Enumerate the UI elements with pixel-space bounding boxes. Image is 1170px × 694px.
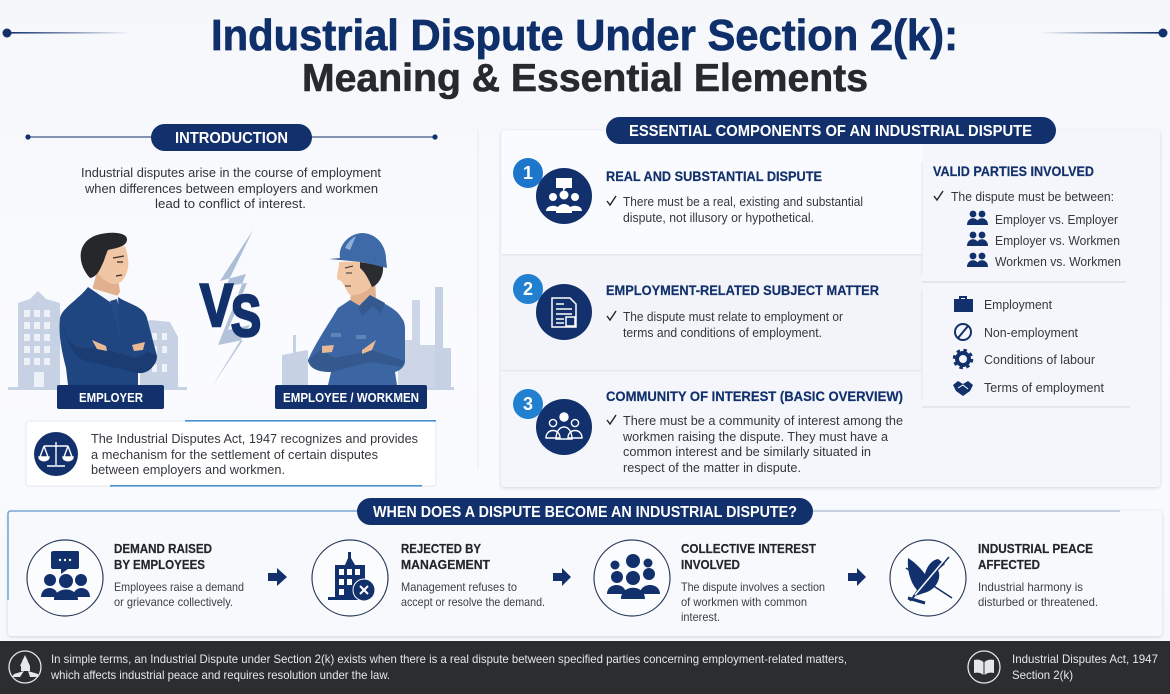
component 2: employment-related subject matter: terms and conditions of employment. bbox=[623, 326, 822, 340]
step 4: industrial peace affected: disturbed or threatened. bbox=[978, 595, 1098, 609]
step 2: rejected by management: accept or resolve the demand. bbox=[401, 595, 545, 609]
callout: Industrial Disputes Act: a mechanism for the settlement of certain disputes bbox=[91, 447, 378, 462]
step 3: collective interest: INVOLVED bbox=[681, 557, 740, 572]
arrow 2 bbox=[553, 568, 571, 586]
arrow 3 bbox=[848, 568, 866, 586]
illustration: lightning bolt bbox=[211, 230, 253, 388]
introduction text: Industrial disputes arise in the course of employment bbox=[81, 165, 381, 180]
callout: Industrial Disputes Act: between employers and workmen. bbox=[91, 462, 285, 477]
illustration: factory skyline behind worker bbox=[282, 287, 454, 390]
step 1: demand raised: BY EMPLOYEES bbox=[114, 557, 205, 572]
item: employment bbox=[954, 296, 1053, 312]
component 1: real and substantial dispute: 1 bbox=[523, 163, 533, 183]
item: conditions of labour bbox=[954, 350, 1095, 368]
illustration: VS: V bbox=[200, 272, 233, 339]
callout: Industrial Disputes Act bbox=[26, 420, 436, 487]
title: Meaning & Essential Elements bbox=[302, 57, 868, 100]
illustration: city buildings behind employer bbox=[8, 291, 187, 390]
component 1: real and substantial dispute bbox=[513, 158, 863, 225]
illustration: VS: S bbox=[231, 284, 261, 349]
step 2: rejected by management: Management refuses to bbox=[401, 580, 517, 594]
step 3: collective interest: The dispute involves a section bbox=[681, 580, 825, 594]
party: employer vs workmen: Employer vs. Workmen bbox=[995, 234, 1120, 248]
introduction heading: INTRODUCTION bbox=[175, 130, 288, 147]
step 4: industrial peace affected: Industrial harmony is bbox=[978, 580, 1083, 594]
step 3: collective interest: of workmen with common bbox=[681, 595, 807, 609]
arrow 1 bbox=[268, 568, 287, 586]
party: workmen vs workmen bbox=[967, 253, 1121, 269]
title bbox=[211, 11, 958, 100]
callout: Industrial Disputes Act: The Industrial Disputes Act, 1947 recognizes and provides bbox=[91, 431, 418, 446]
component 1: real and substantial dispute: dispute, not illusory or hypothetical. bbox=[623, 211, 814, 225]
illustration: VS bbox=[200, 272, 261, 349]
item: terms of employment: Terms of employment bbox=[984, 381, 1105, 395]
item: employment: Employment bbox=[984, 298, 1053, 312]
party: employer vs employer bbox=[967, 211, 1118, 227]
step 1: demand raised bbox=[27, 540, 244, 616]
step 3: collective interest bbox=[594, 540, 825, 624]
step 3: collective interest: interest. bbox=[681, 610, 720, 624]
icon: open book bbox=[968, 651, 1000, 683]
heading: when does a dispute become: WHEN DOES A DISPUTE BECOME AN INDUSTRIAL DISPUTE? bbox=[373, 504, 797, 521]
component 2: employment-related subject matter: 2 bbox=[523, 279, 533, 299]
introduction heading bbox=[25, 124, 438, 151]
valid parties involved: VALID PARTIES INVOLVED bbox=[933, 164, 1094, 179]
step 1: demand raised: DEMAND RAISED bbox=[114, 541, 212, 556]
panel: when does a dispute become an industrial dispute bbox=[8, 498, 1162, 636]
step 4: industrial peace affected: AFFECTED bbox=[978, 557, 1040, 572]
icon: scales of justice bbox=[34, 432, 78, 476]
step 3: collective interest: COLLECTIVE INTEREST bbox=[681, 541, 816, 556]
step 2: rejected by management bbox=[312, 540, 545, 616]
illustration: employer bbox=[59, 233, 157, 385]
item: non-employment bbox=[955, 324, 1079, 340]
subject matter list bbox=[922, 290, 1130, 408]
component 1: real and substantial dispute: REAL AND SUBSTANTIAL DISPUTE bbox=[606, 169, 822, 184]
component 3: community of interest: respect of the matter in dispute. bbox=[623, 461, 801, 475]
component 3: community of interest: There must be a community of interest among the bbox=[623, 414, 903, 428]
footer summary text: In simple terms, an Industrial Dispute under Section 2(k) exists when there is a real dispute between specified parties concerning employment-related matters, bbox=[51, 652, 847, 666]
panel: essential components bbox=[501, 117, 1160, 487]
footer citation: Section 2(k) bbox=[1012, 668, 1073, 682]
component 3: community of interest: 3 bbox=[523, 394, 533, 414]
introduction text: lead to conflict of interest. bbox=[155, 196, 306, 211]
valid parties involved bbox=[922, 162, 1126, 283]
heading: when does a dispute become bbox=[357, 498, 813, 525]
component 3: community of interest: common interest and be similarly situated in bbox=[623, 445, 871, 459]
step 2: rejected by management: MANAGEMENT bbox=[401, 557, 490, 572]
footer summary text bbox=[50, 652, 847, 682]
component 1: real and substantial dispute: There must be a real, existing and substantial bbox=[623, 195, 863, 209]
component 2: employment-related subject matter: EMPLOYMENT-RELATED SUBJECT MATTER bbox=[606, 283, 879, 298]
step 1: demand raised: or grievance collectively. bbox=[114, 595, 233, 609]
step 4: industrial peace affected bbox=[890, 540, 1098, 616]
introduction text bbox=[81, 165, 381, 211]
component 2: employment-related subject matter bbox=[513, 274, 879, 340]
item: conditions of labour: Conditions of labour bbox=[984, 353, 1095, 367]
label: employer: EMPLOYER bbox=[79, 390, 144, 405]
heading: essential components: ESSENTIAL COMPONENTS OF AN INDUSTRIAL DISPUTE bbox=[629, 123, 1032, 140]
footer citation: Industrial Disputes Act, 1947 bbox=[1012, 652, 1158, 666]
footer summary text: which affects industrial peace and requires resolution under the law. bbox=[50, 668, 390, 682]
label: employee / workmen: EMPLOYEE / WORKMEN bbox=[283, 390, 419, 405]
footer citation bbox=[1012, 652, 1158, 682]
component 2: employment-related subject matter: The dispute must relate to employment or bbox=[623, 310, 843, 324]
component 3: community of interest: workmen raising the dispute. They must have a bbox=[622, 430, 888, 444]
party: employer vs workmen bbox=[967, 232, 1120, 248]
step 1: demand raised: Employees raise a demand bbox=[114, 580, 244, 594]
icon: law figure bbox=[9, 651, 41, 683]
step 2: rejected by management: REJECTED BY bbox=[401, 541, 481, 556]
party: employer vs employer: Employer vs. Employer bbox=[995, 213, 1118, 227]
item: non-employment: Non-employment bbox=[984, 326, 1079, 340]
illustration: worker bbox=[308, 233, 405, 385]
label: employee / workmen bbox=[275, 385, 427, 409]
label: employer bbox=[57, 385, 164, 409]
heading: essential components bbox=[606, 117, 1056, 144]
footer bar bbox=[0, 641, 1170, 694]
title: Industrial Dispute Under Section 2(k): bbox=[211, 11, 958, 60]
introduction text: when differences between employers and workmen bbox=[84, 181, 378, 196]
step 4: industrial peace affected: INDUSTRIAL PEACE bbox=[978, 541, 1093, 556]
component 3: community of interest bbox=[513, 389, 903, 475]
party: workmen vs workmen: Workmen vs. Workmen bbox=[995, 255, 1121, 269]
valid parties involved: The dispute must be between: bbox=[951, 190, 1114, 204]
component 3: community of interest: COMMUNITY OF INTEREST (BASIC OVERVIEW) bbox=[606, 389, 903, 404]
